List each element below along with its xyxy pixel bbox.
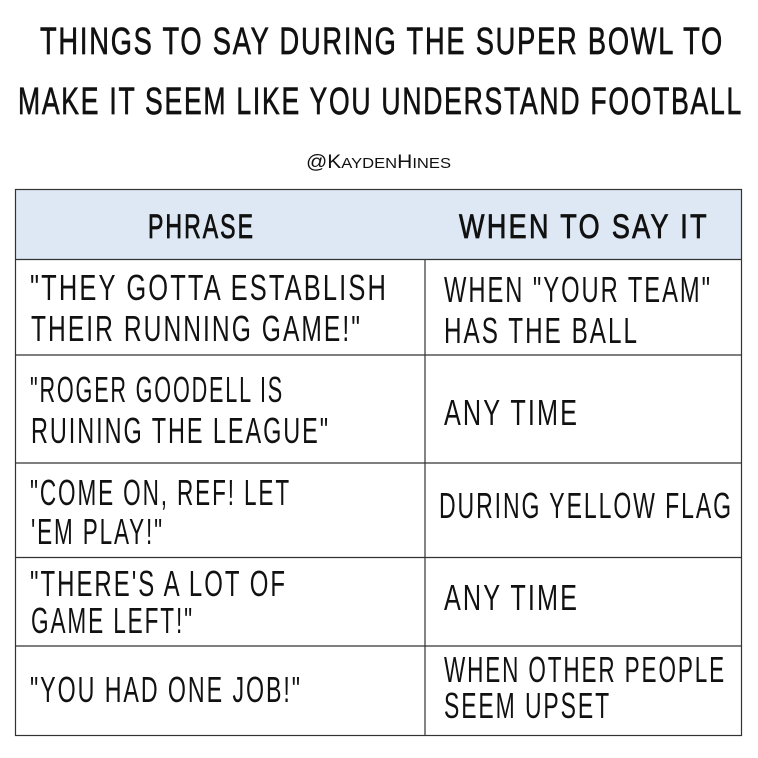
row 5 phrase: "YOU HAD ONE JOB!" [30, 669, 302, 710]
row 3 phrase: "COME ON, REF! LET [30, 472, 291, 513]
row 1 phrase: "THEY GOTTA ESTABLISH [30, 267, 388, 308]
table grid [15, 190, 742, 736]
column header: phrase: PHRASE [148, 208, 255, 246]
row 1 phrase [30, 267, 388, 349]
title [18, 21, 743, 123]
row 3 phrase: 'EM PLAY!" [31, 511, 164, 552]
row 5 timing [444, 649, 726, 726]
row 4 phrase [30, 563, 287, 641]
row 1 timing: HAS THE BALL [444, 310, 639, 351]
table header background [16, 190, 742, 260]
row 4 timing: ANY TIME [444, 577, 579, 618]
row 3 phrase [30, 472, 291, 552]
row 2 timing: ANY TIME [444, 392, 579, 433]
row 4 phrase: "THERE'S A LOT OF [30, 563, 287, 604]
row 1 timing [444, 269, 712, 351]
row 5 timing: SEEM UPSET [444, 685, 611, 726]
row 1 phrase: THEIR RUNNING GAME!" [31, 308, 362, 349]
row 2 phrase: "ROGER GOODELL IS [30, 369, 284, 410]
row 2 phrase [30, 369, 330, 451]
row 2 phrase: RUINING THE LEAGUE" [31, 410, 330, 451]
author credit: @KAYDEN HINES [306, 152, 451, 173]
row 4 phrase: GAME LEFT!" [31, 600, 194, 641]
table [15, 190, 742, 736]
